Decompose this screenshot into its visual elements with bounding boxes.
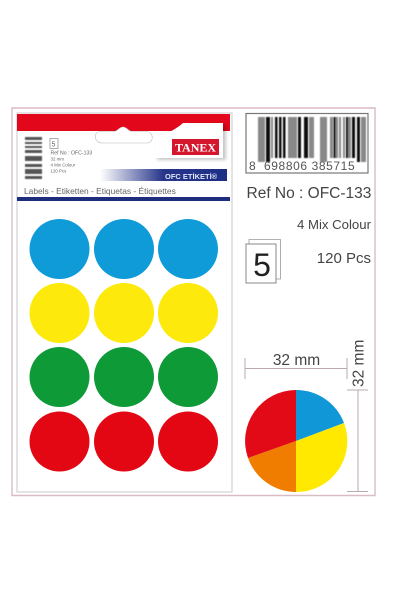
pie segment: orange	[248, 441, 296, 492]
small product info: 32 mm	[50, 156, 64, 162]
reference number: Ref No : OFC-133	[246, 185, 371, 202]
small product info: 4 Mix Colour	[50, 162, 76, 168]
blue rule	[17, 197, 230, 201]
piece count: 120 Pcs	[317, 250, 371, 267]
pie segment: red	[245, 390, 296, 458]
panel: sticker sheet	[17, 113, 232, 492]
brand tag: TANEX	[175, 140, 216, 154]
width dimension	[245, 352, 347, 379]
sticker row: yellow	[30, 283, 218, 343]
barcode: 698806 385715	[264, 159, 355, 173]
blue product banner	[100, 169, 227, 181]
small barcode	[25, 137, 42, 179]
width dimension: 32 mm	[273, 352, 320, 369]
colour pie diagram	[245, 390, 347, 492]
barcode number: 8	[249, 159, 256, 173]
pie segment: yellow	[296, 423, 347, 492]
sticker row: red	[30, 412, 218, 472]
pack icon: 5	[253, 247, 271, 283]
red header band	[17, 114, 230, 131]
pie segment: blue	[296, 390, 344, 441]
small product info: Ref No : OFC-133	[50, 150, 92, 156]
colour count: 4 Mix Colour	[297, 217, 372, 232]
pack icon	[246, 240, 280, 283]
sticker row: blue	[30, 219, 218, 279]
brand tag	[155, 123, 226, 160]
small product info: 120 Pcs	[50, 168, 67, 174]
multilingual labels line: Labels - Etiketten - Etiquetas - Étiquettes	[24, 186, 176, 196]
small product info: 5	[52, 142, 56, 148]
small product info	[50, 142, 92, 174]
sticker row: green	[30, 347, 218, 407]
height dimension	[347, 340, 368, 492]
outer package frame	[12, 108, 375, 496]
banner text: OFC ETİKETİ®	[165, 172, 218, 181]
barcode	[246, 114, 368, 173]
hang tab	[95, 127, 152, 143]
small pack count icon	[50, 138, 58, 148]
height dimension: 32 mm	[350, 340, 368, 387]
